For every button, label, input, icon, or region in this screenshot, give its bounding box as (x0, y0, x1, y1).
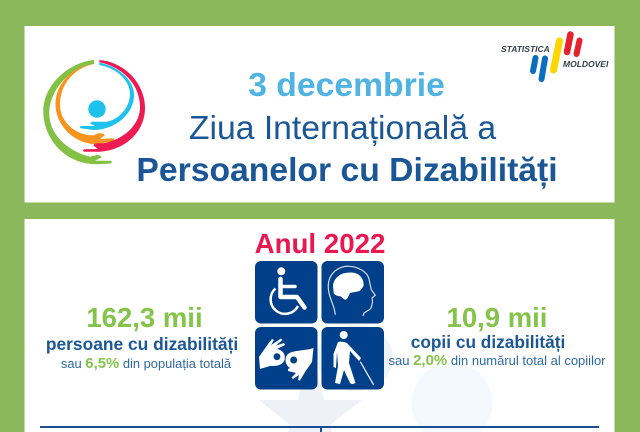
heading: title line 2: Persoanelor cu Dizabilități (136, 151, 558, 189)
icon: brain head tile (322, 261, 384, 324)
icon: blind person with cane tile (322, 327, 384, 390)
logo: Statistica Moldovei: STATISTICA (501, 44, 550, 54)
stat: persons with disabilities: sau 6,5% din populația totală (61, 356, 232, 372)
heading: date: 3 decembrie (248, 66, 445, 104)
stat: children with disabilities: copii cu dizabilități (411, 332, 565, 352)
icon: head dot (88, 100, 106, 118)
icon: hands circle logo (43, 60, 145, 164)
heading: year: Anul 2022 (255, 228, 385, 259)
stat: persons with disabilities (46, 302, 238, 372)
panel: header (24, 26, 614, 202)
panel: statistics (24, 219, 614, 432)
logo: Statistica Moldovei (501, 34, 609, 79)
icon: sign language tile (255, 327, 318, 390)
stat: persons with disabilities: 162,3 mii (86, 302, 203, 333)
stat: children with disabilities: 10,9 mii (447, 302, 547, 333)
logo: Statistica Moldovei: MOLDOVEI (563, 59, 609, 69)
watermark: star (259, 345, 362, 432)
divider: horizontal rule with centre stem (40, 426, 599, 432)
icon: wheelchair tile (255, 261, 318, 324)
watermark: circle right (412, 363, 493, 432)
stat: persons with disabilities: persoane cu dizabilități (46, 334, 238, 354)
heading: title line 1: Ziua Internațională a (189, 109, 496, 147)
stat: children with disabilities (388, 302, 606, 369)
watermark: circle centre (317, 325, 393, 391)
stat: children with disabilities: sau 2,0% din numărul total al copiilor (388, 352, 606, 369)
